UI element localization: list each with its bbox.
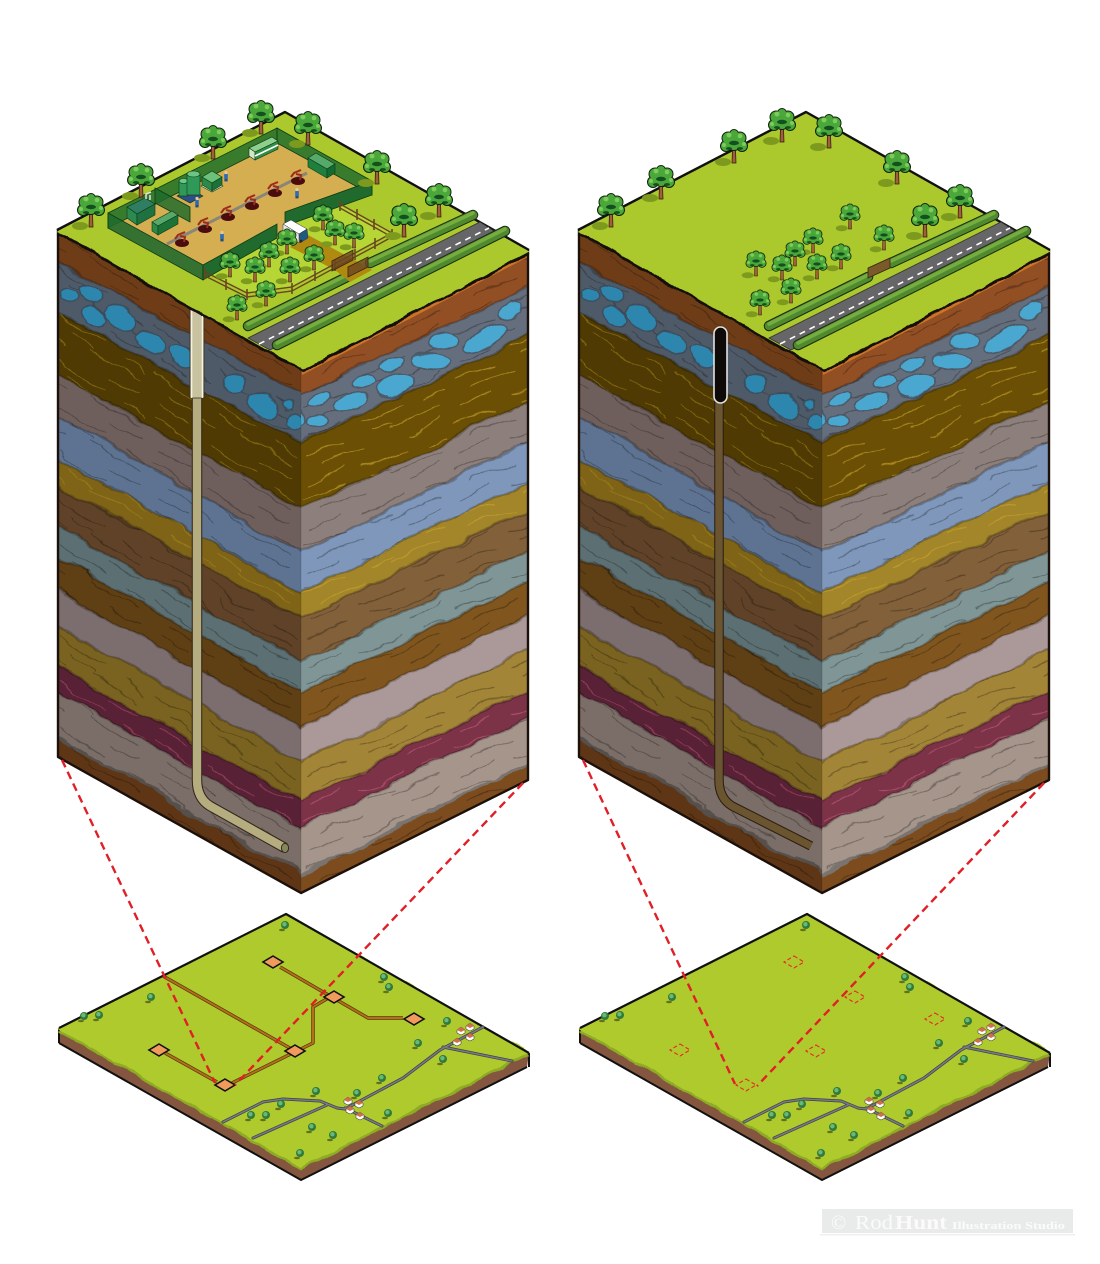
red dashed projection lines: [62, 760, 1044, 1086]
wooden paddock fence: [205, 200, 392, 300]
treatment tanks: [177, 171, 203, 203]
geological strata: right block: [551, 200, 1081, 920]
copyright watermark: Illustration Studio: [952, 1221, 1065, 1232]
pump jacks: [175, 170, 305, 247]
long container: [152, 211, 178, 235]
grass surface: [578, 112, 1050, 373]
storage container back right: [308, 153, 335, 178]
panel: undeveloped block: [551, 108, 1081, 920]
well pads: [149, 956, 424, 1091]
planned pad outlines: [670, 956, 945, 1091]
map base: right: [580, 914, 1050, 1180]
underground well pipe: [714, 327, 811, 846]
horizontal well pipe: [190, 308, 289, 853]
gravel yard: [108, 143, 372, 280]
geological strata: left block: [30, 200, 560, 920]
trees: [592, 108, 974, 317]
road and hedges: [769, 213, 1026, 350]
paddock grass: [203, 204, 392, 293]
copyright watermark: Rod: [855, 1212, 893, 1234]
collector pipe: [167, 173, 307, 244]
driveway: [290, 235, 372, 282]
copyright watermark: ©: [831, 1212, 846, 1234]
panel: map with footprint outlines: [580, 914, 1050, 1180]
site gates: [332, 250, 368, 277]
pipelines: [163, 967, 403, 1083]
control box: [201, 171, 223, 192]
grass surface: [57, 112, 529, 373]
panel: well pad block: [30, 100, 560, 920]
panel: map with well pads: [59, 914, 529, 1180]
copyright watermark: Hunt: [895, 1212, 947, 1234]
back fence: [108, 128, 372, 228]
green bus: [249, 137, 278, 160]
trees: [72, 100, 453, 322]
white van: [283, 220, 308, 243]
well pad compound: [108, 128, 372, 280]
front fence: [108, 181, 372, 280]
workers: [195, 171, 299, 241]
copyright watermark: [820, 1209, 1075, 1236]
generator: [127, 192, 155, 225]
field gate: [868, 258, 890, 278]
road and hedges: [248, 213, 505, 350]
map base: left: [59, 914, 529, 1180]
